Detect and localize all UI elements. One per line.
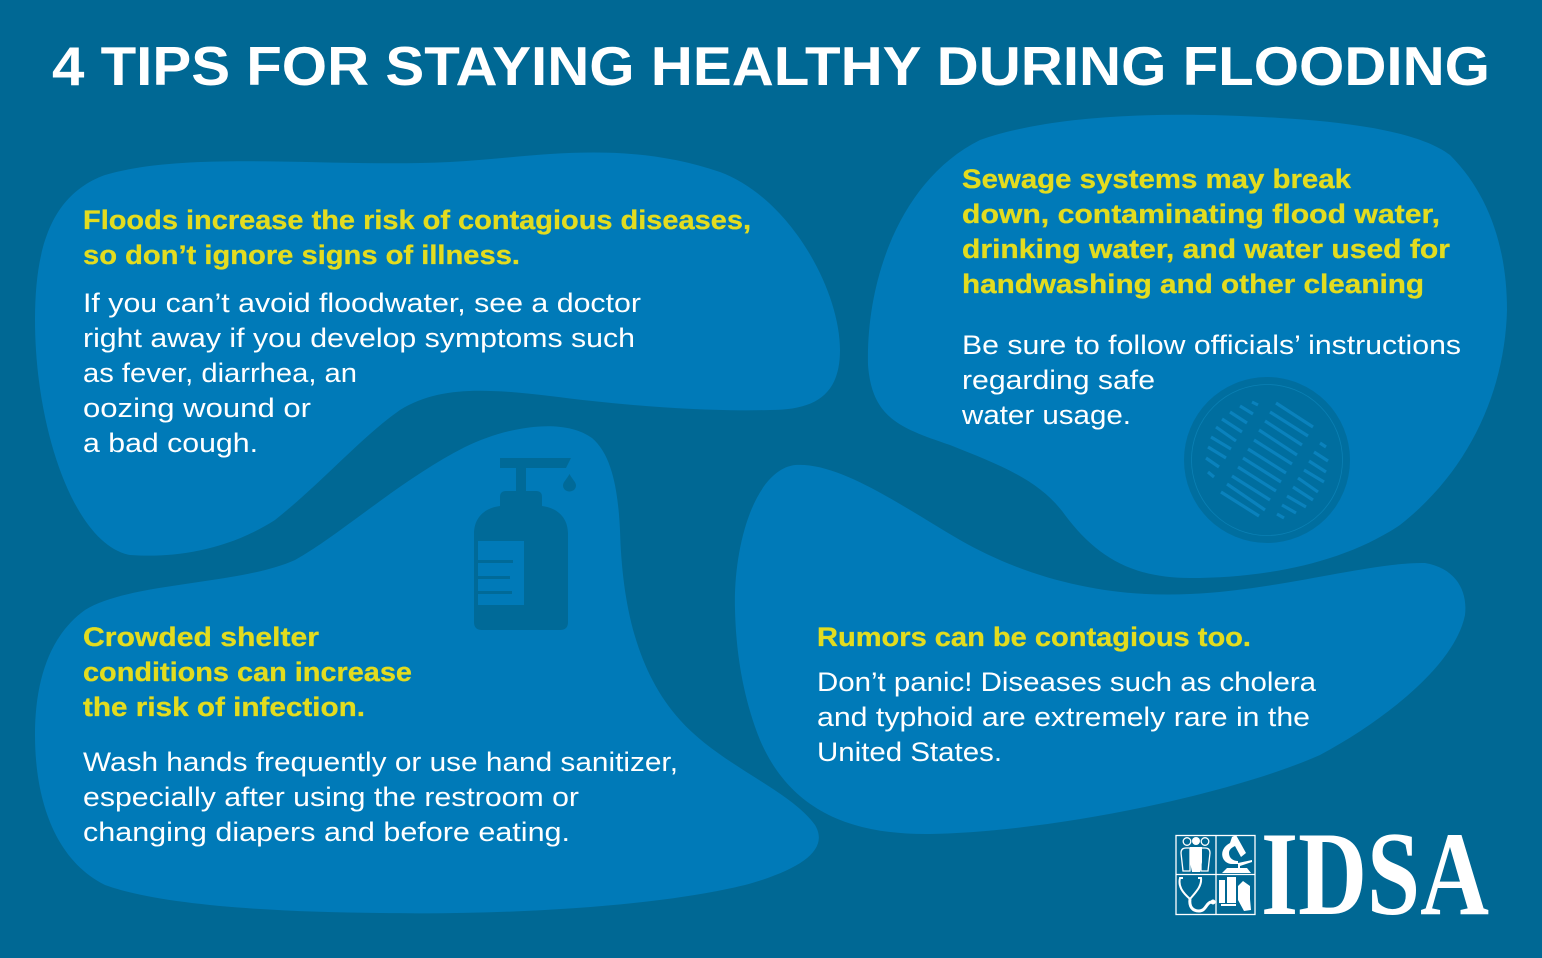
heading <box>962 164 1451 299</box>
panel: rumors <box>735 465 1465 834</box>
body text: oozing wound or <box>83 393 311 423</box>
body text: Don’t panic! Diseases such as cholera <box>817 667 1317 697</box>
heading <box>83 205 751 270</box>
heading: so don’t ignore signs of illness. <box>83 240 520 270</box>
icon: manhole cover <box>1184 377 1350 543</box>
body text: regarding safe <box>962 365 1155 395</box>
heading: handwashing and other cleaning <box>962 269 1424 299</box>
logo emblem <box>1176 835 1255 914</box>
heading: Sewage systems may break <box>962 164 1352 194</box>
heading: Floods increase the risk of contagious diseases, <box>83 205 751 235</box>
heading: Crowded shelter <box>83 622 320 652</box>
logo: IDSA <box>1176 807 1489 940</box>
heading <box>83 622 412 722</box>
title: 4 TIPS FOR STAYING HEALTHY DURING FLOODING <box>52 35 1490 97</box>
panel: contagious diseases <box>35 153 840 556</box>
body text: water usage. <box>961 400 1131 430</box>
body text <box>83 288 641 458</box>
heading: Rumors can be contagious too. <box>817 622 1251 652</box>
heading: drinking water, and water used for <box>962 234 1451 264</box>
body text <box>961 330 1461 430</box>
heading: the risk of infection. <box>83 692 365 722</box>
panel: crowded shelter <box>35 426 819 913</box>
body text: If you can’t avoid floodwater, see a doctor <box>83 288 641 318</box>
icon: hand sanitizer bottle <box>474 458 576 630</box>
body text: Be sure to follow officials’ instructions <box>962 330 1461 360</box>
heading: down, contaminating flood water, <box>962 199 1440 229</box>
heading: conditions can increase <box>83 657 412 687</box>
body text: changing diapers and before eating. <box>83 817 570 847</box>
body text: especially after using the restroom or <box>83 782 579 812</box>
body text: as fever, diarrhea, an <box>83 358 357 388</box>
body text <box>83 747 678 847</box>
body text: right away if you develop symptoms such <box>83 323 635 353</box>
panel: sewage systems <box>868 115 1507 578</box>
body text: United States. <box>817 737 1002 767</box>
body text: and typhoid are extremely rare in the <box>817 702 1310 732</box>
logo wordmark: IDSA <box>1261 807 1489 940</box>
body text <box>817 667 1317 767</box>
body text: a bad cough. <box>83 428 258 458</box>
body text: Wash hands frequently or use hand sanitizer, <box>83 747 678 777</box>
